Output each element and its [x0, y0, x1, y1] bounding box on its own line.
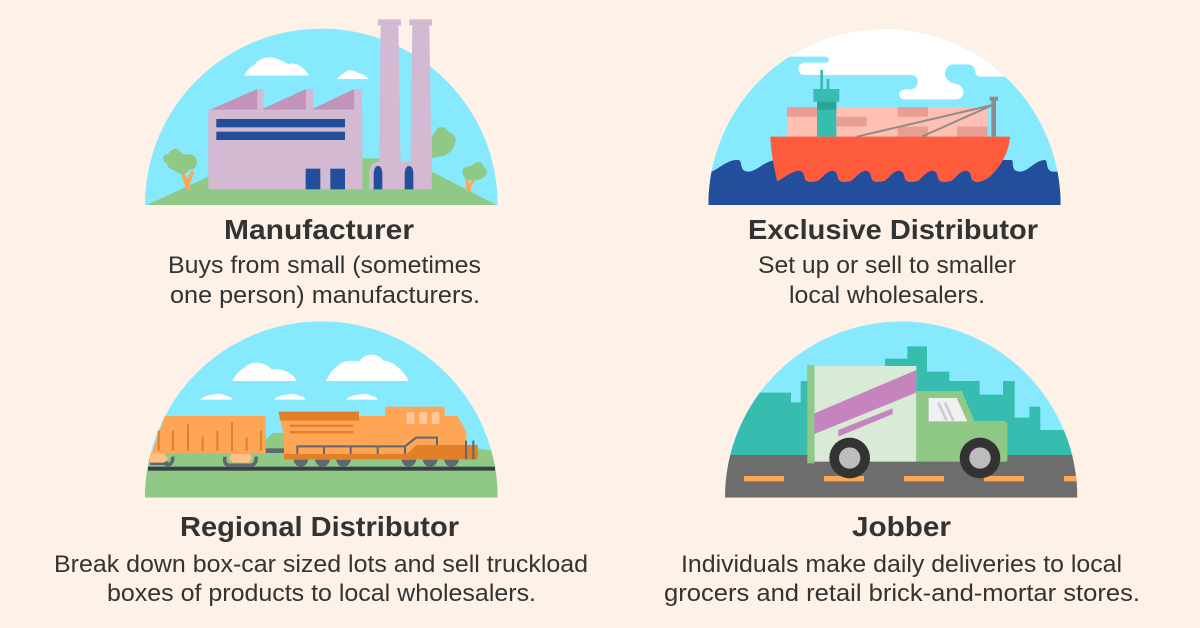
smokestacks — [369, 19, 432, 189]
panel: regional distributor — [54, 310, 588, 607]
description: grocers and retail brick-and-mortar stores. — [664, 580, 1140, 607]
factory building — [208, 89, 362, 189]
illustration: factory — [145, 19, 498, 205]
description: Buys from small (sometimes — [168, 252, 481, 279]
sea — [708, 160, 1061, 205]
description: Set up or sell to smaller — [758, 252, 1016, 279]
illustration: freight train — [145, 322, 498, 498]
train clouds — [201, 355, 409, 400]
description — [168, 252, 481, 309]
locomotive — [279, 407, 478, 467]
heading: Jobber — [852, 511, 951, 542]
description: Individuals make daily deliveries to local — [681, 551, 1122, 578]
panel: manufacturer — [145, 19, 498, 308]
heading: Exclusive Distributor — [748, 214, 1038, 245]
illustration: cargo ship — [708, 28, 1061, 205]
description: one person) manufacturers. — [170, 282, 480, 309]
illustration: delivery truck — [725, 322, 1078, 498]
panel: exclusive distributor — [708, 28, 1061, 303]
description: Break down box-car sized lots and sell truckload — [54, 551, 588, 578]
boxcar — [150, 416, 284, 465]
heading: Manufacturer — [224, 214, 414, 245]
description: local wholesalers. — [789, 282, 985, 309]
white cloud sky — [790, 29, 1005, 100]
description: boxes of products to local wholesalers. — [107, 580, 536, 607]
description — [664, 551, 1140, 607]
panel: jobber — [664, 310, 1140, 607]
road — [722, 455, 1082, 498]
hull — [770, 137, 1010, 182]
trees — [163, 127, 487, 192]
crane mast — [857, 97, 998, 137]
ship tower — [813, 70, 839, 137]
heading: Regional Distributor — [180, 511, 459, 542]
truck — [807, 365, 1007, 478]
cargo containers — [787, 107, 988, 137]
description — [54, 551, 588, 607]
city skyline — [722, 346, 1082, 457]
description — [758, 252, 1016, 309]
rail — [148, 467, 495, 471]
clouds — [244, 57, 368, 79]
